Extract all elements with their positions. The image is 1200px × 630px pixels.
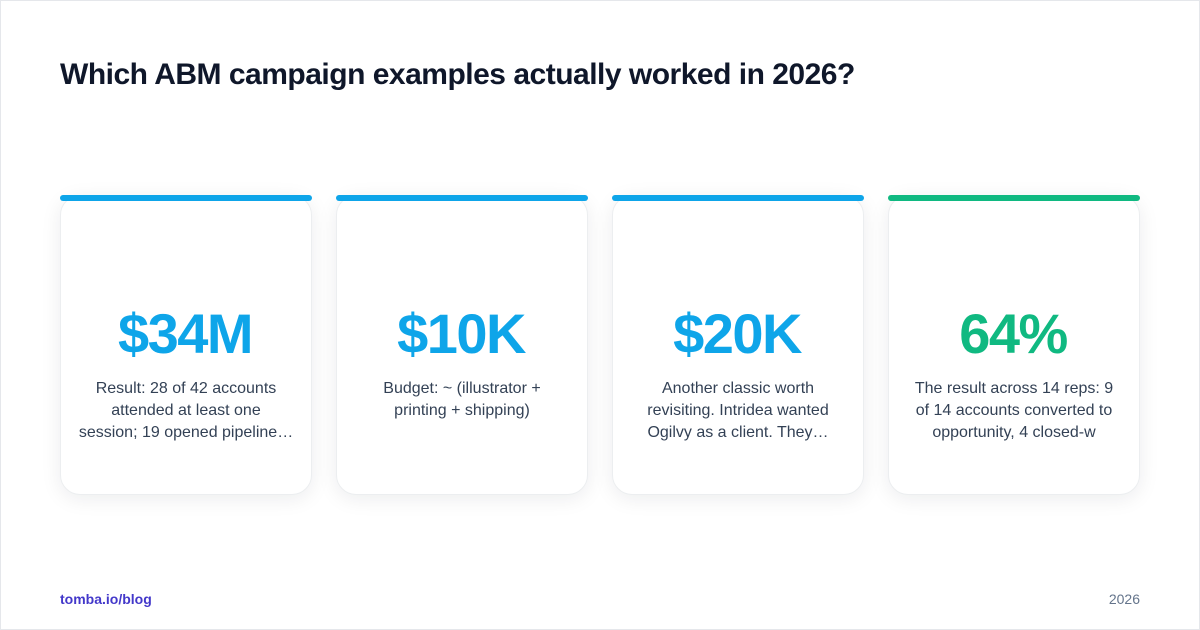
description: session; 19 opened pipeline…: [79, 424, 293, 441]
description: [383, 380, 541, 419]
description: [915, 380, 1113, 441]
card body: [888, 195, 1140, 495]
card body: [612, 195, 864, 495]
description: attended at least one: [111, 402, 261, 419]
description: of 14 accounts converted to: [916, 402, 1112, 419]
card body: [60, 195, 312, 495]
description: Ogilvy as a client. They…: [647, 424, 829, 441]
description: printing + shipping): [394, 402, 530, 419]
big number: 64%: [959, 302, 1067, 365]
description: [647, 380, 829, 441]
description: Result: 28 of 42 accounts: [96, 380, 276, 397]
description: opportunity, 4 closed-w: [932, 424, 1096, 441]
description: [79, 380, 293, 441]
footer brand: tomba.io/blog: [60, 591, 152, 607]
title: Which ABM campaign examples actually worked in 2026?: [60, 58, 855, 91]
description: Budget: ~ (illustrator +: [383, 380, 541, 397]
description: Another classic worth: [662, 380, 814, 397]
card body: [336, 195, 588, 495]
accent bar: [336, 195, 588, 201]
big number: $20K: [673, 302, 801, 365]
accent bar: [888, 195, 1140, 201]
panel: $10K card: [334, 195, 590, 500]
panel: 64% card: [886, 195, 1142, 500]
accent bar: [612, 195, 864, 201]
big number: $10K: [397, 302, 525, 365]
footer year: 2026: [1109, 591, 1140, 607]
description: revisiting. Intridea wanted: [647, 402, 829, 419]
panel: $34M card: [58, 195, 314, 500]
panel: $20K card: [610, 195, 866, 500]
description: The result across 14 reps: 9: [915, 380, 1113, 397]
big number: $34M: [118, 302, 252, 365]
accent bar: [60, 195, 312, 201]
